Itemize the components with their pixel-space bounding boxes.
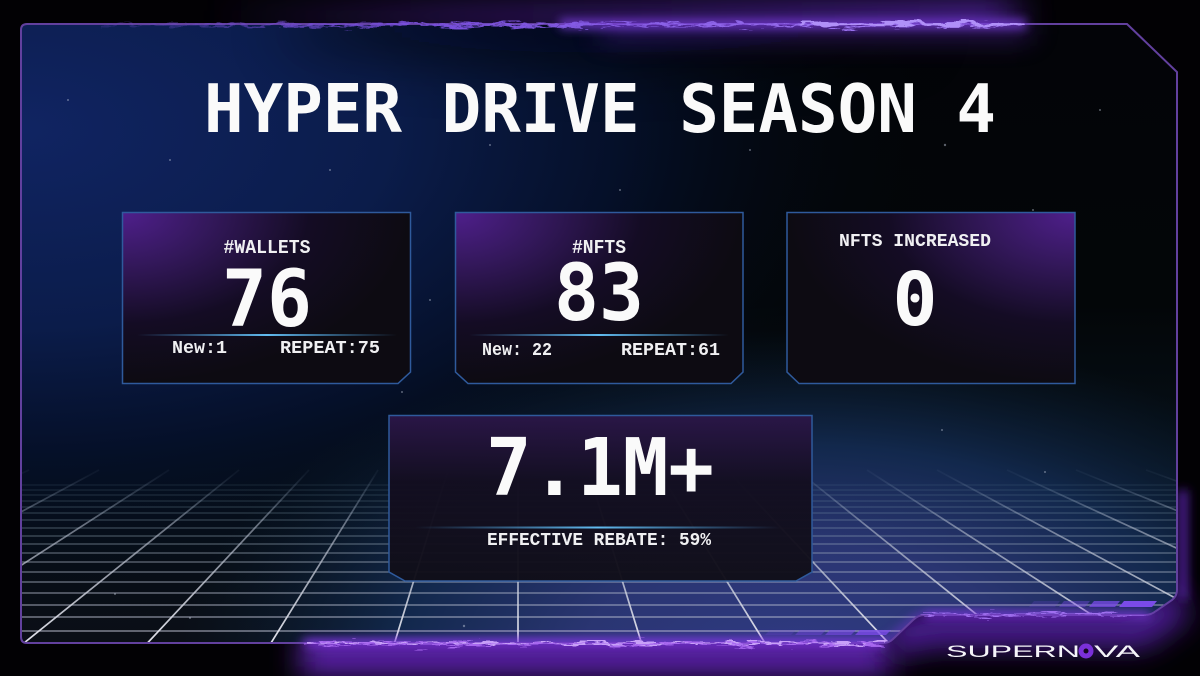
rebate label: EFFECTIVE REBATE: 59% <box>487 531 711 551</box>
logo: supernova: SUPERN <box>946 642 1080 661</box>
panel: nfts increased <box>787 212 1075 384</box>
nfts increased value: 0 <box>892 257 938 343</box>
wallets repeat count: REPEAT:75 <box>280 339 380 359</box>
logo: supernova: VA <box>1094 642 1141 661</box>
nfts heading: #NFTS <box>572 237 626 259</box>
panel: wallets <box>122 212 410 384</box>
purple glow outside borders <box>220 16 1183 655</box>
title: HYPER DRIVE SEASON 4 <box>204 70 996 148</box>
nfts repeat count: REPEAT:61 <box>621 341 720 361</box>
nfts increased heading: NFTS INCREASED <box>839 232 991 252</box>
lightning: bottom border <box>305 615 1150 644</box>
rebate value: 7.1M+ <box>486 422 714 514</box>
nfts new count: New: 22 <box>482 341 552 361</box>
panel: rebate <box>389 416 812 581</box>
panel: nfts <box>456 212 743 384</box>
purple dashes lower right <box>765 601 1157 635</box>
logo: supernova <box>946 642 1141 661</box>
wallets new count: New:1 <box>172 339 227 359</box>
stars <box>67 99 1101 627</box>
chart: perspective grid floor <box>0 470 1200 643</box>
lightning: top border <box>100 24 1026 25</box>
wallets value: 76 <box>222 255 312 345</box>
inner lightning glow <box>300 617 1150 644</box>
nfts value: 83 <box>554 249 644 339</box>
wallets heading: #WALLETS <box>224 237 310 259</box>
